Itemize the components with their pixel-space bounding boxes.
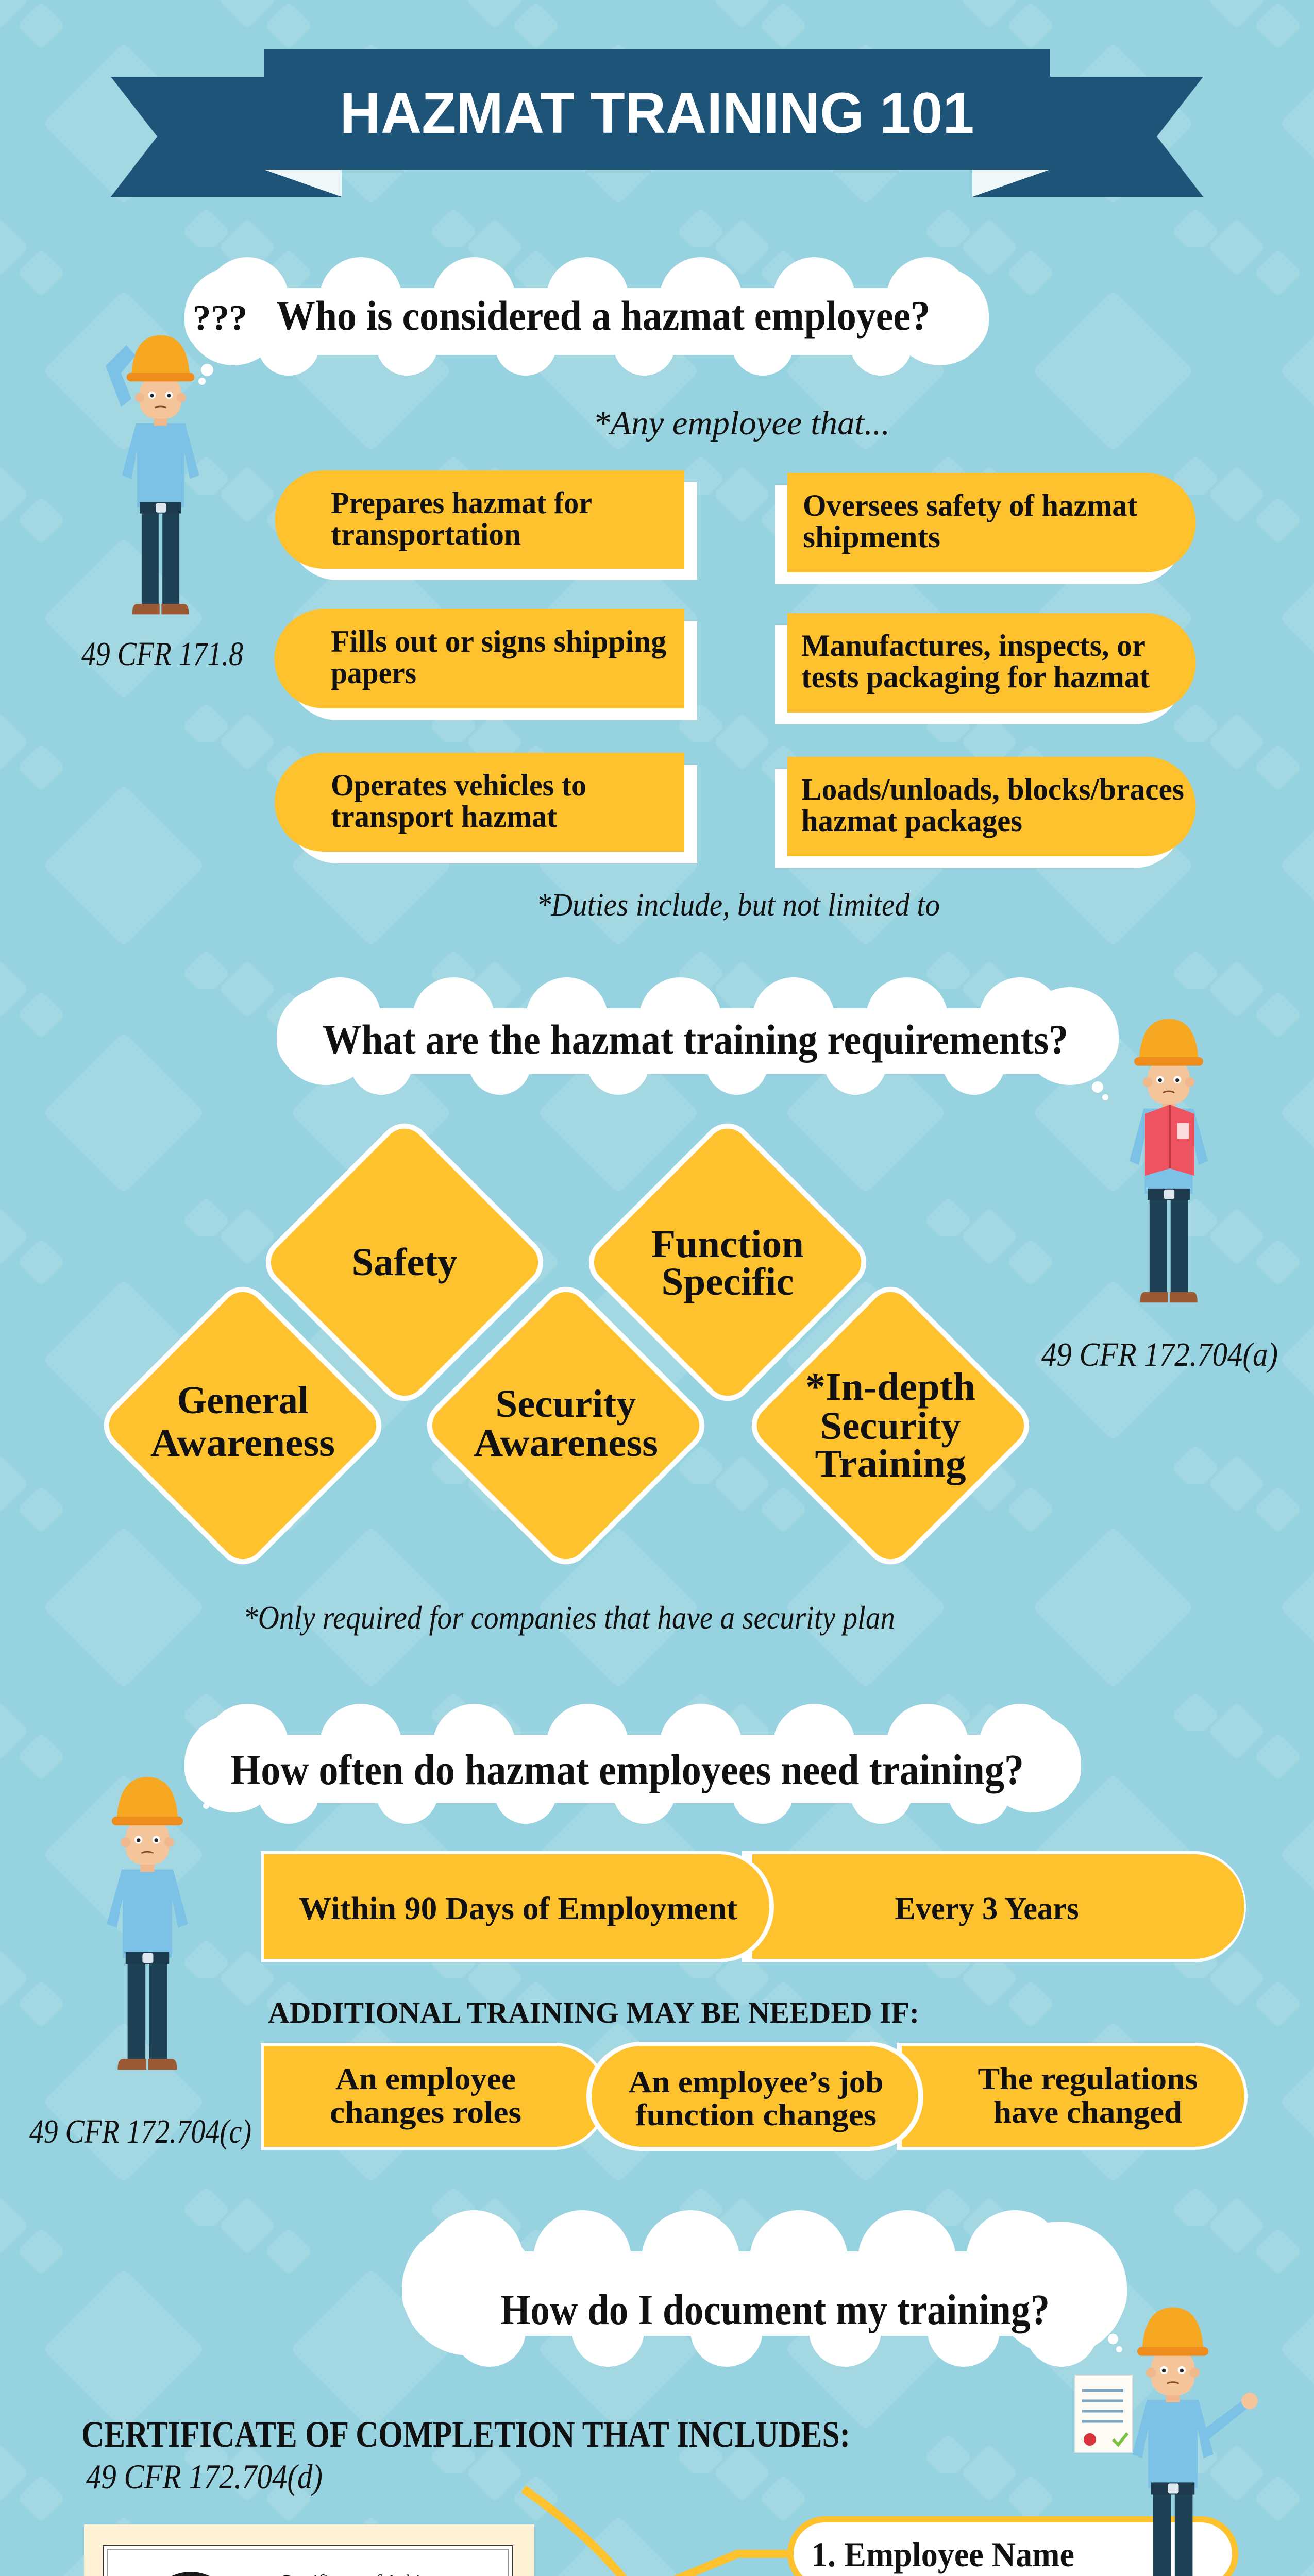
citation 49 CFR 171.8: 49 CFR 171.8 <box>81 635 243 673</box>
worker 3 thinking <box>107 1777 188 2070</box>
bar: every 3 years: Every 3 Years <box>895 1891 1079 1926</box>
diamond: general awareness <box>97 1280 389 1571</box>
diamond: security awareness: Security <box>496 1382 636 1426</box>
pill: job function changes <box>586 2042 923 2151</box>
worker 2 reading book <box>1130 1019 1208 1302</box>
box: oversees safety: shipments <box>803 520 940 554</box>
note: any employee that: *Any employee that... <box>593 404 890 442</box>
box: operates vehicles <box>275 753 697 863</box>
arc connector with branches <box>524 2489 794 2576</box>
box: operates vehicles: transport hazmat <box>331 800 557 834</box>
diamonds: training types <box>97 1116 1036 1571</box>
certificate image <box>84 2524 534 2576</box>
diamond: security awareness: Awareness <box>474 1421 658 1465</box>
title: HAZMAT TRAINING 101 <box>340 81 974 145</box>
box: loads/unloads <box>775 757 1195 868</box>
duty boxes right column <box>775 473 1195 868</box>
diamond: function specific <box>582 1116 873 1408</box>
cloud: who is a hazmat employee <box>184 257 989 385</box>
bar: within 90 days <box>261 1851 774 1962</box>
bars: frequency <box>261 1851 1246 1962</box>
pill: employee changes roles: An employee <box>335 2062 516 2096</box>
diamond: in-depth security training: *In-depth <box>805 1365 975 1409</box>
box: manufactures packaging: Manufactures, inspects, or <box>801 629 1145 663</box>
pill: regulations changed: The regulations <box>978 2062 1198 2096</box>
box: operates vehicles: Operates vehicles to <box>331 768 586 802</box>
box: oversees safety: Oversees safety of hazmat <box>803 488 1137 522</box>
box: manufactures packaging: tests packaging for hazmat <box>801 660 1150 694</box>
heading: additional training: ADDITIONAL TRAINING MAY BE NEEDED IF: <box>268 1996 919 2029</box>
diamond: function specific: Function <box>651 1223 804 1266</box>
box: fills out shipping papers: papers <box>331 656 416 690</box>
box: fills out shipping papers: Fills out or signs shipping <box>331 624 666 658</box>
box: loads/unloads: hazmat packages <box>801 804 1022 838</box>
pill: job function changes: An employee’s job <box>629 2065 883 2099</box>
diamond: general awareness: General <box>177 1379 308 1422</box>
list boxes: certificate contents <box>790 2519 1235 2576</box>
pill: regulations changed: have changed <box>993 2095 1182 2129</box>
heading: certificate of completion: CERTIFICATE OF COMPLETION THAT INCLUDES: <box>81 2414 850 2455</box>
diamond: security awareness <box>420 1280 712 1571</box>
box: prepares hazmat: Prepares hazmat for <box>331 486 592 520</box>
pill: regulations changed <box>897 2043 1248 2150</box>
worker 1 scratching head <box>106 335 199 614</box>
box: prepares hazmat: transportation <box>331 517 521 551</box>
citation 49 CFR 172.704(d): 49 CFR 172.704(d) <box>86 2457 323 2496</box>
badge <box>144 2572 237 2576</box>
note: duties include: *Duties include, but not limited to <box>536 888 940 923</box>
diamond: general awareness: Awareness <box>150 1421 335 1465</box>
note: only required for security plan: *Only required for companies that have a security plan <box>243 1599 895 1636</box>
item 1: 1. Employee Name <box>811 2535 1074 2574</box>
question marks: ??? <box>193 298 247 338</box>
diamond: safety: Safety <box>351 1241 458 1284</box>
diamond: in-depth security training: Security <box>820 1404 961 1448</box>
box: prepares hazmat <box>275 470 697 580</box>
diamond: function specific: Specific <box>662 1260 794 1303</box>
worker 4 holding certificate, thumbs up <box>1075 2308 1258 2576</box>
pill: employee changes roles: changes roles <box>330 2095 521 2129</box>
heading: document training: How do I document my training? <box>500 2286 1050 2334</box>
box: oversees safety <box>775 473 1195 584</box>
pills: additional training triggers <box>261 2042 1248 2151</box>
diamond: in-depth security training <box>745 1280 1036 1571</box>
title banner <box>111 49 1203 197</box>
bar: every 3 years <box>742 1851 1246 1962</box>
box: manufactures packaging <box>775 613 1195 724</box>
box: fills out shipping papers <box>274 609 697 720</box>
cloud: how do I document <box>402 2210 1127 2367</box>
citation 49 CFR 172.704(a): 49 CFR 172.704(a) <box>1041 1336 1278 1374</box>
duty boxes left column <box>274 470 697 863</box>
heading: requirements: What are the hazmat training requirements? <box>323 1016 1068 1063</box>
cloud: how often <box>184 1704 1081 1824</box>
item 1 <box>790 2519 1235 2576</box>
pill: job function changes: function changes <box>635 2098 877 2132</box>
heading: who is considered: Who is considered a hazmat employee? <box>276 292 930 339</box>
diamond: in-depth security training: Training <box>815 1442 966 1485</box>
diamond: safety <box>259 1116 550 1408</box>
cloud: training requirements <box>277 977 1119 1100</box>
heading: how often: How often do hazmat employees need training? <box>230 1746 1024 1794</box>
box: loads/unloads: Loads/unloads, blocks/braces <box>801 772 1184 806</box>
citation 49 CFR 172.704(c): 49 CFR 172.704(c) <box>29 2113 251 2150</box>
pill: employee changes roles <box>261 2043 608 2150</box>
bar: within 90 days: Within 90 Days of Employment <box>299 1891 737 1926</box>
